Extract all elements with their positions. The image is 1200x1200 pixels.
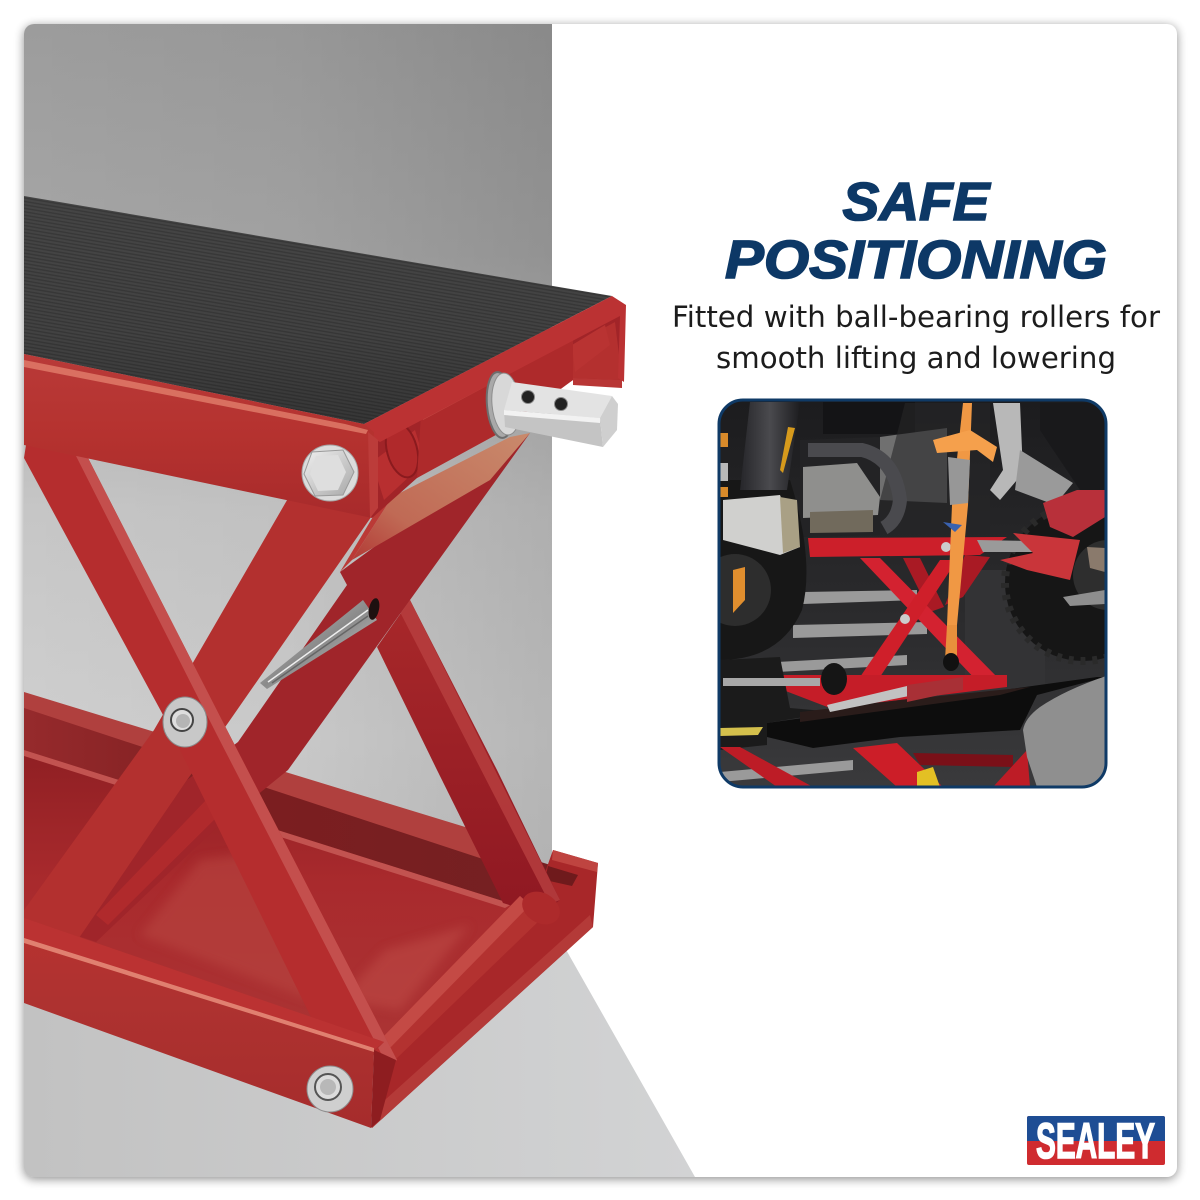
jack scissor	[860, 555, 1000, 682]
workshop rails	[720, 590, 927, 782]
gloved hands	[977, 490, 1105, 580]
bottom roller tube	[384, 892, 556, 1058]
rail top face	[100, 961, 384, 1050]
front scissor arm descending	[24, 445, 397, 1065]
tray bolt	[307, 1066, 353, 1112]
tan reflection strut	[352, 433, 530, 560]
engine	[800, 402, 1106, 537]
tools	[723, 663, 963, 712]
front wheel and fork	[699, 402, 806, 660]
body text	[672, 300, 1160, 375]
tray front rail	[24, 918, 396, 1128]
ramp	[720, 657, 1106, 750]
logo base	[1027, 1116, 1165, 1165]
shaft lower facet	[504, 410, 603, 447]
shaft top facet	[504, 382, 612, 418]
front scissor arm rising	[24, 495, 376, 938]
shaft end face	[600, 396, 618, 447]
trouser knee	[1023, 676, 1106, 787]
title line 2: POSITIONING	[725, 230, 1107, 290]
lower cross tube	[96, 800, 218, 925]
top frame channel	[24, 296, 626, 518]
silver adjuster shaft	[484, 371, 618, 447]
tray floor	[24, 750, 512, 1045]
backdrop shade	[965, 570, 1045, 690]
rail end lip	[371, 1050, 396, 1128]
centre pivot pin	[163, 697, 207, 747]
tray floor sheen	[146, 856, 298, 992]
roller tube	[378, 430, 419, 500]
tray back wall	[24, 700, 560, 915]
rear scissor arms and rod	[78, 433, 560, 942]
block plate	[417, 335, 573, 478]
body line 2: smooth lifting and lowering	[716, 341, 1116, 375]
warning label	[917, 767, 940, 787]
channel lower lip	[573, 378, 622, 388]
chrome roller rod	[260, 600, 377, 689]
panel: product photo	[24, 24, 695, 1177]
frame highlight	[24, 360, 368, 434]
rear wheel	[1005, 505, 1161, 661]
jack base	[783, 675, 1007, 708]
jack base tray	[24, 692, 598, 1128]
inset photo: motorcycle on lift with jack	[699, 400, 1161, 787]
body line 1: Fitted with ball-bearing rollers for	[672, 300, 1160, 334]
channel front face	[24, 354, 374, 518]
tray right end channel	[372, 850, 598, 1128]
hex bolt	[302, 445, 358, 501]
channel inner	[372, 312, 624, 518]
title line 1: SAFE	[842, 172, 992, 232]
lower scissor lift	[720, 743, 1030, 787]
rail highlight	[24, 938, 374, 1052]
rod socket	[368, 598, 380, 620]
channel top edge	[364, 296, 626, 442]
rear rising arm	[78, 433, 530, 942]
title: SAFE POSITIONING	[725, 172, 1107, 290]
rubber platform top	[24, 196, 612, 424]
logo: SEALEY	[1027, 1113, 1165, 1169]
rear descending arm	[377, 600, 560, 915]
logo blue band	[1027, 1116, 1165, 1141]
inset border	[719, 400, 1106, 787]
pivots	[900, 614, 910, 624]
floor wedge	[24, 951, 695, 1177]
right tube stub	[573, 325, 606, 345]
jack top bar	[808, 537, 1007, 557]
tray back rim	[24, 692, 481, 858]
orange strap	[933, 403, 997, 671]
grey studio backdrop	[24, 24, 552, 1177]
